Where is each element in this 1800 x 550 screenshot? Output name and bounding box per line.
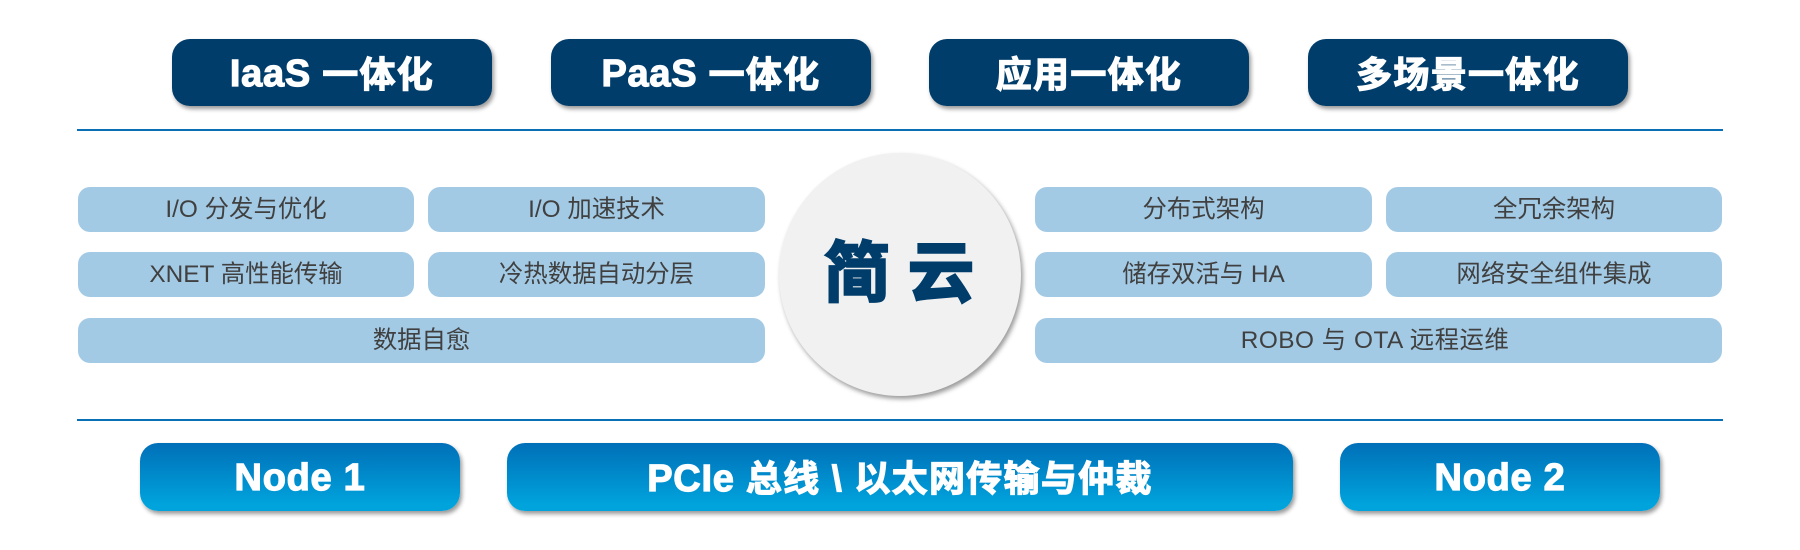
pill: 储存双活与 HA <box>1035 252 1372 297</box>
button: PaaS 一体化: PaaS <box>602 53 697 95</box>
button: 应用一体化 <box>929 39 1249 106</box>
button: PCIe 总线 \ 以太网传输与仲裁: 总线 \ 以太网传输与仲裁 <box>746 458 1153 499</box>
button: PCIe 总线 \ 以太网传输与仲裁: PCIe <box>647 458 735 500</box>
pill: 冷热数据自动分层: 冷热数据自动分层 <box>499 261 694 288</box>
pill: 网络安全组件集成: 网络安全组件集成 <box>1456 261 1652 288</box>
button: IaaS 一体化: IaaS <box>230 53 311 95</box>
pill: 冷热数据自动分层 <box>428 252 765 297</box>
button: PaaS 一体化 <box>551 39 871 106</box>
button: 应用一体化: 应用一体化 <box>996 54 1182 94</box>
button: PCIe 总线 \ 以太网传输与仲裁 <box>507 443 1293 511</box>
pill: I/O 分发与优化 <box>78 187 414 232</box>
button: Node 1 <box>140 443 460 511</box>
pill: 全冗余架构: 全冗余架构 <box>1493 196 1615 223</box>
pill: I/O 分发与优化: I/O 分发与优化 <box>165 196 327 223</box>
pill: 数据自愈: 数据自愈 <box>373 327 470 354</box>
pill: 全冗余架构 <box>1386 187 1722 232</box>
center circle: 简云: 简云 <box>824 236 992 310</box>
pill: 网络安全组件集成 <box>1386 252 1722 297</box>
pill: XNET 高性能传输: XNET 高性能传输 <box>149 261 343 288</box>
button: IaaS 一体化: 一体化 <box>322 54 434 94</box>
pill: ROBO 与 OTA 远程运维 <box>1035 318 1722 363</box>
button: PaaS 一体化: 一体化 <box>709 54 820 94</box>
pill: 分布式架构 <box>1035 187 1372 232</box>
button: 多场景一体化 <box>1308 39 1628 106</box>
button: Node 1: Node 1 <box>235 456 365 498</box>
pill: XNET 高性能传输 <box>78 252 414 297</box>
pill: I/O 加速技术 <box>428 187 765 232</box>
center circle: 简云 <box>779 153 1021 396</box>
pill: 数据自愈 <box>78 318 765 363</box>
button: 多场景一体化: 多场景一体化 <box>1356 54 1580 94</box>
pill: 分布式架构: 分布式架构 <box>1143 196 1264 223</box>
pill: ROBO 与 OTA 远程运维: ROBO 与 OTA 远程运维 <box>1241 327 1509 354</box>
button: IaaS 一体化 <box>172 39 492 106</box>
pill: 储存双活与 HA: 储存双活与 HA <box>1122 261 1285 288</box>
pill: I/O 加速技术: I/O 加速技术 <box>528 196 665 223</box>
button: Node 2 <box>1340 443 1660 511</box>
button: Node 2: Node 2 <box>1435 456 1565 498</box>
